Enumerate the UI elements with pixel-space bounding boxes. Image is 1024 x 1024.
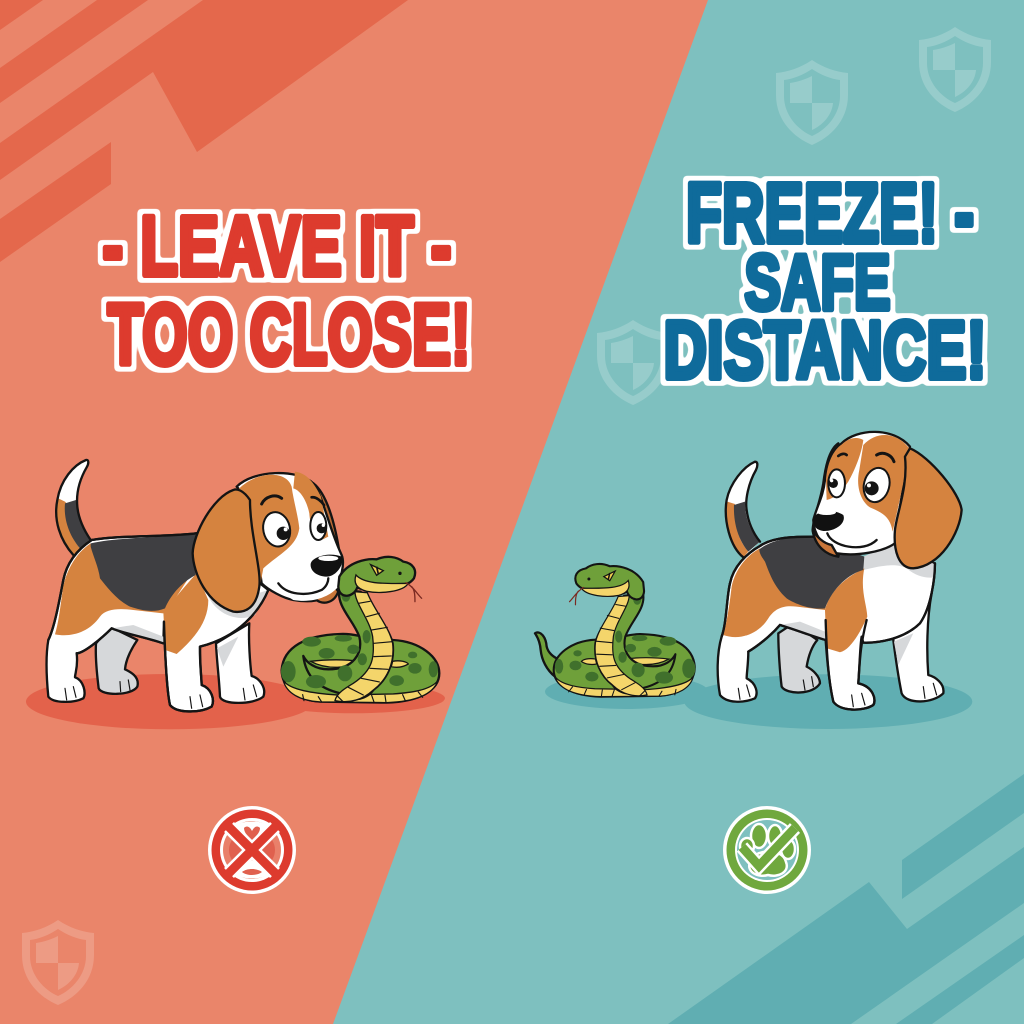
ground shadows (545, 674, 972, 729)
dog tail (56, 460, 91, 555)
dog far legs (778, 593, 943, 701)
icon: shield watermark bottom left (22, 920, 94, 1005)
panel: teal background (333, 0, 1024, 1024)
heading: leave it, too close (102, 199, 470, 383)
illustration: beagle and snake, safe distance (535, 432, 972, 729)
illustration: beagle sniffing snake, too close (26, 460, 445, 729)
icon: shield watermark top (776, 60, 848, 145)
snake close to dog (281, 557, 439, 703)
dog body (718, 537, 935, 710)
dog tail (726, 462, 760, 557)
ground shadows (26, 674, 445, 729)
icon: shield watermark middle (597, 320, 669, 405)
heading: freeze, safe distance: SAFE (744, 238, 890, 326)
icon: green safe paw check badge (723, 806, 811, 894)
decorative dark coral stripes (0, 0, 408, 262)
icon: shield watermark top right (919, 27, 991, 112)
snake far from dog (554, 564, 695, 697)
snake tail (535, 632, 558, 677)
dog body (47, 533, 268, 711)
dog head (193, 472, 343, 612)
dog head (813, 432, 962, 568)
dog far legs (96, 623, 264, 703)
decorative dark teal stripes (668, 774, 1024, 1024)
heading: leave it, too close: TOO CLOSE! (108, 287, 470, 383)
heading: leave it, too close: - LEAVE IT - (102, 199, 452, 293)
icon: red prohibited cross badge (208, 806, 296, 894)
heading: freeze, safe distance (664, 166, 986, 396)
